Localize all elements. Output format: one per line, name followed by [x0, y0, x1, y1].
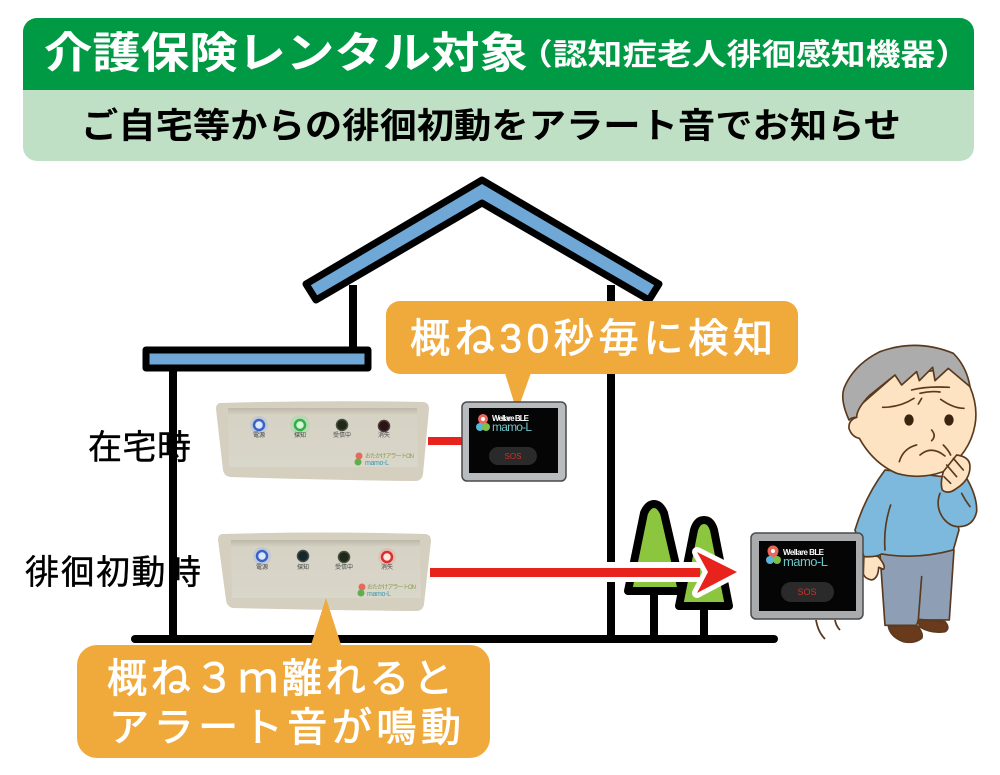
motion lines under tag: [816, 620, 840, 639]
transmitter tag: carried outside: Wellare BLE: [783, 548, 825, 557]
callout: alarm at about 3m: [77, 598, 490, 758]
LED captions: [253, 431, 390, 439]
shoes: [888, 625, 922, 642]
hair: [843, 345, 970, 420]
callout: alarm at about 3m: アラート音が鳴動: [109, 706, 461, 750]
transmitter tag: carried outside: [751, 533, 863, 619]
LED captions: 電源: [253, 431, 265, 439]
tag logo pin: [766, 546, 781, 564]
label: wandering onset: 徘徊初動時: [25, 554, 201, 592]
fist: [941, 455, 970, 492]
LED: detect: [298, 550, 308, 562]
product logo: mamo-L: [365, 460, 389, 467]
red arrow: wandering: [430, 552, 737, 593]
transmitter tag: at home: Wellare BLE: [492, 414, 530, 423]
LED captions: 受信中: [335, 563, 353, 571]
LED captions: 消失: [378, 431, 390, 439]
LED captions: 受信中: [333, 431, 351, 439]
subtitle in parentheses: （認知症老人徘徊感知機器）: [518, 39, 970, 72]
red signal line: at home: [428, 437, 464, 445]
transmitter tag: at home: mamo-L: [492, 420, 532, 434]
callout: detect every 30 seconds: 概ね30秒毎に検知: [410, 317, 773, 361]
house outline: [146, 180, 659, 640]
LED captions: 電源: [256, 563, 268, 571]
lower roof: [146, 350, 368, 368]
LED: power: [250, 416, 268, 434]
label: at home: 在宅時: [88, 429, 191, 467]
product logo: おたかけアラートON: [367, 584, 416, 591]
LED: lost: [378, 548, 396, 566]
ground line: [131, 635, 778, 643]
tag logo pin: [476, 414, 490, 431]
SOS button: [781, 582, 834, 602]
trees: [628, 504, 729, 638]
transmitter tag: at home: SOS: [505, 452, 521, 461]
product logo: [354, 452, 414, 467]
nose and mouth: [932, 430, 934, 441]
LED: power: [253, 547, 271, 565]
LED captions: 消失: [381, 563, 393, 571]
elderly man illustration: [843, 345, 977, 642]
trousers: [880, 550, 954, 625]
LED captions: 探知: [294, 431, 306, 439]
callout: alarm at about 3m: 概ね３ｍ離れると: [107, 657, 453, 701]
left hand: [863, 553, 884, 580]
LED: receiving: [338, 552, 350, 562]
product logo: おたかけアラートON: [365, 453, 414, 460]
eyes: [904, 414, 914, 426]
product logo: mamo-L: [367, 591, 391, 598]
sweater: [855, 470, 977, 557]
LED captions: 探知: [297, 563, 309, 571]
face: [849, 368, 976, 476]
header banner: [23, 18, 974, 161]
transmitter tag: carried outside: SOS: [797, 587, 817, 597]
receiver device: at home: [216, 401, 429, 481]
LED: detect: [290, 415, 310, 435]
product logo: [358, 584, 416, 598]
LED: receiving: [336, 420, 348, 430]
title: 介護保険レンタル対象: [44, 30, 528, 78]
LED: lost: [378, 420, 390, 432]
tagline: ご自宅等からの徘徊初動をアラート音でお知らせ: [81, 107, 901, 146]
callout: detect every 30 seconds: [386, 301, 798, 412]
upper roof: [306, 180, 659, 300]
transmitter tag: carried outside: mamo-L: [783, 554, 828, 569]
eyebrows and wrinkles: [883, 387, 964, 408]
receiver device: wandering: [218, 532, 431, 611]
SOS button: [489, 447, 537, 465]
LED captions: [256, 563, 393, 571]
transmitter tag: at home: [462, 402, 566, 481]
